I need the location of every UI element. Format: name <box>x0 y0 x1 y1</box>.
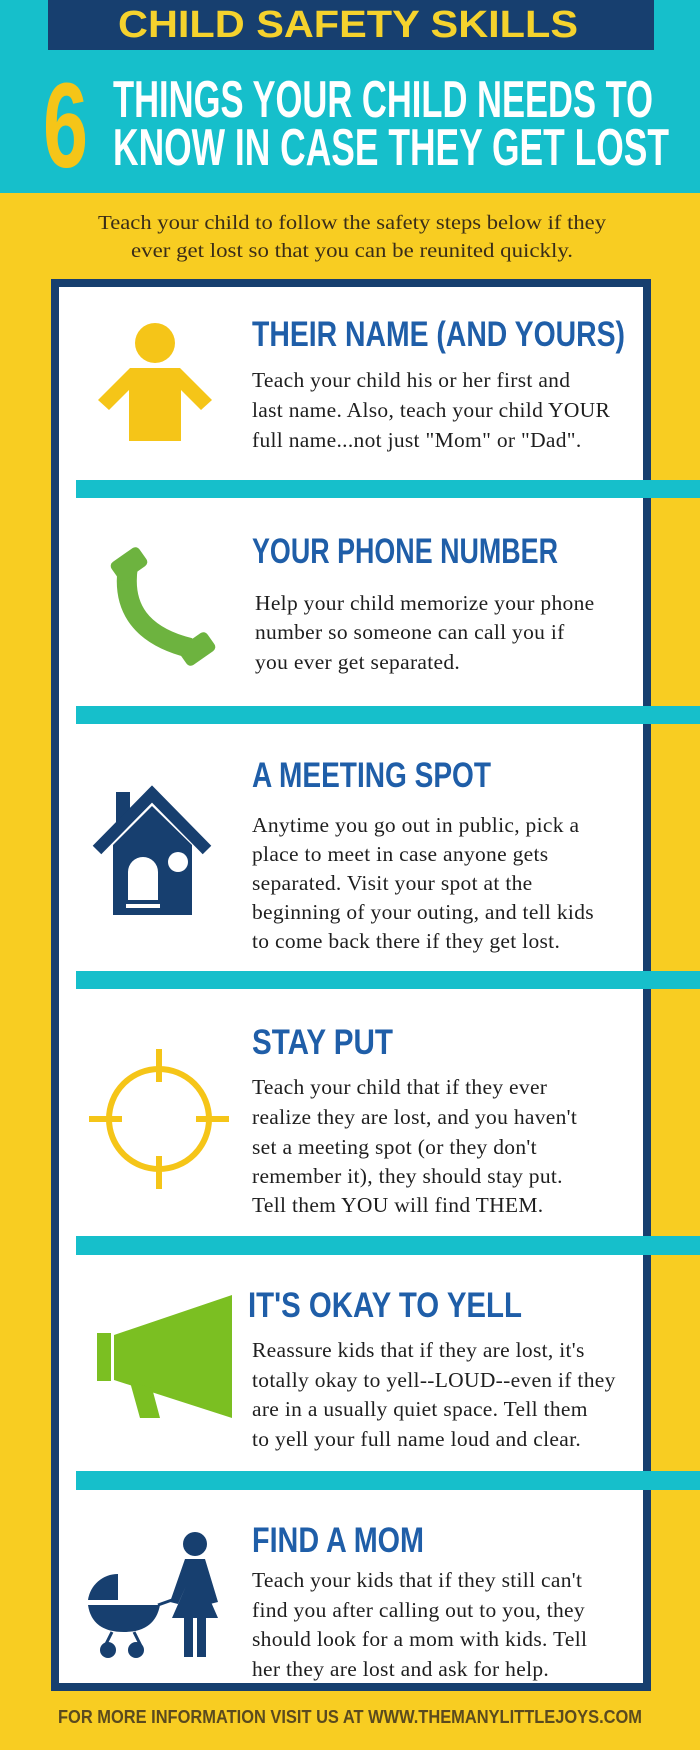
text block <box>252 1568 587 1681</box>
text block: Teach your child his or her first and <box>252 368 570 392</box>
heading: THEIR NAME (AND YOURS) <box>252 315 625 354</box>
text block: find you after calling out to you, they <box>252 1598 585 1622</box>
text block: her they are lost and ask for help. <box>252 1657 549 1681</box>
text block <box>255 591 594 674</box>
text block: are in a usually quiet space. Tell them <box>252 1397 588 1421</box>
icon: megaphone <box>97 1295 232 1418</box>
heading: STAY PUT <box>252 1023 393 1062</box>
title bar <box>48 0 654 50</box>
main panel <box>55 283 647 1687</box>
intro text <box>98 213 606 262</box>
text block: Reassure kids that if they are lost, it's <box>252 1338 585 1362</box>
text block: to come back there if they get lost. <box>252 929 560 953</box>
text block: you ever get separated. <box>255 650 460 674</box>
main title <box>113 71 669 177</box>
text block: last name. Also, teach your child YOUR <box>252 398 610 422</box>
text block: place to meet in case anyone gets <box>252 842 548 866</box>
text block: set a meeting spot (or they don't <box>252 1135 537 1159</box>
text block: totally okay to yell--LOUD--even if they <box>252 1368 616 1392</box>
text block: separated. Visit your spot at the <box>252 871 532 895</box>
section 2: phone <box>109 532 594 674</box>
text block: should look for a mom with kids. Tell <box>252 1627 587 1651</box>
text block: full name...not just "Mom" or "Dad". <box>252 428 582 452</box>
heading: YOUR PHONE NUMBER <box>252 532 558 571</box>
text block: Teach your kids that if they still can't <box>252 1568 582 1592</box>
section 3: meeting spot <box>97 756 594 953</box>
text block <box>252 368 610 452</box>
text block: realize they are lost, and you haven't <box>252 1105 577 1129</box>
icon: house <box>97 792 207 915</box>
text block: beginning of your outing, and tell kids <box>252 900 594 924</box>
text block: Teach your child that if they ever <box>252 1075 547 1099</box>
intro text: Teach your child to follow the safety steps below if they <box>98 213 606 234</box>
text block <box>252 1075 577 1217</box>
intro text: ever get lost so that you can be reunited quickly. <box>131 241 573 262</box>
icon: mom with stroller <box>88 1532 218 1658</box>
text block <box>252 1338 616 1451</box>
text block: to yell your full name loud and clear. <box>252 1427 581 1451</box>
icon: child person <box>98 323 212 441</box>
heading: IT'S OKAY TO YELL <box>248 1286 522 1325</box>
section 6: find a mom <box>88 1521 587 1681</box>
text block: Tell them YOU will find THEM. <box>252 1193 543 1217</box>
separators <box>76 480 700 1490</box>
section 5: yell <box>97 1286 616 1451</box>
heading: A MEETING SPOT <box>252 756 491 795</box>
text block: number so someone can call you if <box>255 620 565 644</box>
footer: FOR MORE INFORMATION VISIT US AT WWW.THEMANYLITTLEJOYS.COM <box>58 1707 642 1727</box>
section 1: their name <box>98 315 625 452</box>
section 4: stay put <box>89 1023 577 1217</box>
title bar: CHILD SAFETY SKILLS <box>118 4 578 46</box>
icon: crosshair <box>89 1049 229 1189</box>
text block: Help your child memorize your phone <box>255 591 594 615</box>
big number 6: 6 <box>43 57 88 193</box>
header band <box>0 0 700 193</box>
text block <box>252 813 594 953</box>
icon: phone <box>109 545 217 668</box>
heading: FIND A MOM <box>252 1521 424 1560</box>
text block: Anytime you go out in public, pick a <box>252 813 579 837</box>
text block: remember it), they should stay put. <box>252 1164 563 1188</box>
